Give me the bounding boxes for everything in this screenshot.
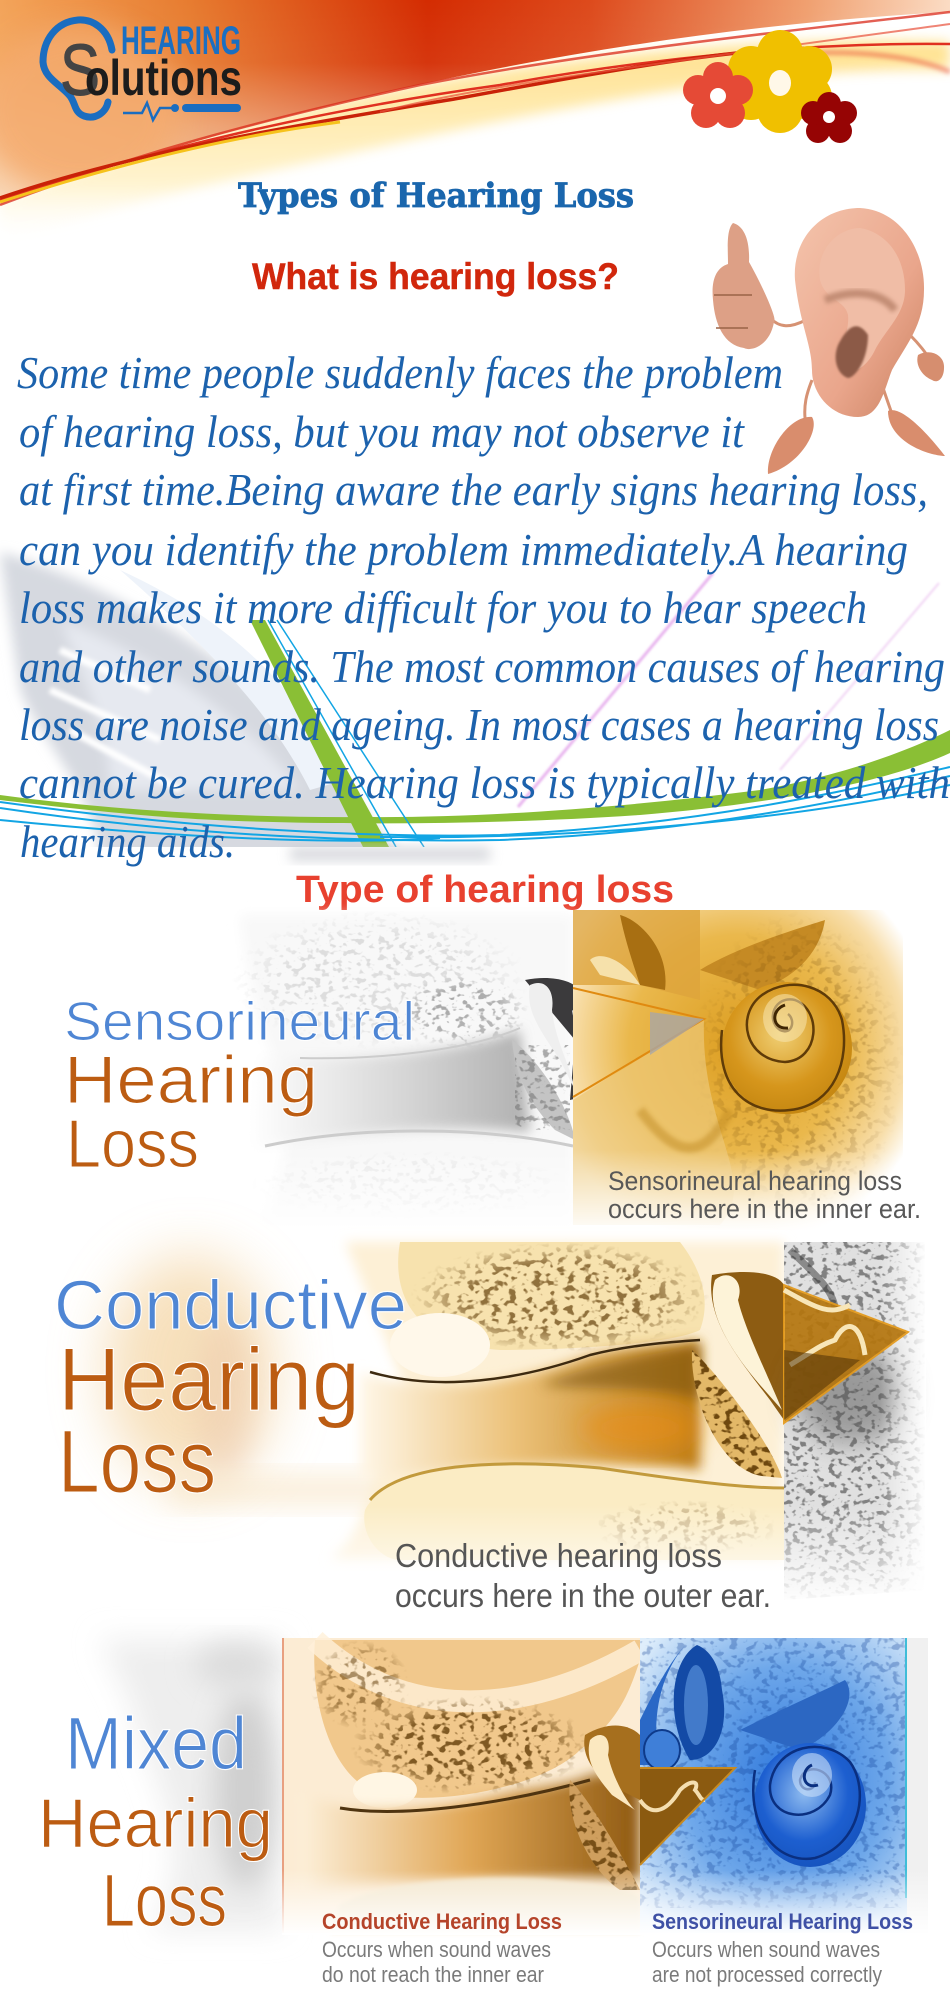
icon: ear outline: [43, 20, 112, 117]
ear body: [795, 208, 924, 417]
body paragraph: of hearing loss, but you may not observe it: [19, 406, 745, 457]
blue cochlea: [754, 1743, 866, 1867]
globe and swoosh backdrop: [0, 552, 950, 860]
right hand: [917, 352, 944, 381]
blue sensorineural illustration: [640, 1638, 928, 1933]
conductive caption: Conductive Hearing Loss: [322, 1909, 562, 1934]
orange pointer triangle: [640, 1768, 735, 1865]
heading: What is hearing loss?: What is hearing loss?: [252, 256, 619, 297]
logo word: HEARING: HEARING: [121, 19, 241, 63]
icon: yellow flower: [728, 30, 832, 133]
grey area: [784, 1242, 926, 1602]
panel title: Sensorineural: [64, 990, 415, 1052]
icon: red flower: [683, 62, 753, 128]
panel title: [38, 1702, 273, 1942]
conductive caption: [322, 1909, 562, 1987]
sensorineural caption: [652, 1909, 913, 1987]
header swoosh banner: [0, 0, 950, 245]
icon: pulse line and bar: [123, 103, 172, 120]
icon: dark red flower: [801, 92, 857, 143]
caption: [395, 1537, 771, 1614]
conductive caption: do not reach the inner ear: [322, 1962, 544, 1987]
panel title: Hearing: [64, 1042, 318, 1118]
panel title: Loss: [58, 1411, 216, 1511]
caption: [608, 1166, 921, 1224]
body paragraph: hearing aids.: [20, 816, 235, 867]
right foot: [888, 410, 945, 456]
caption: Conductive hearing loss: [395, 1537, 722, 1574]
captions: [322, 1909, 913, 1987]
faint purple streaks: [518, 573, 713, 807]
caption: occurs here in the inner ear.: [608, 1194, 921, 1224]
body paragraph: loss makes it more difficult for you to hear speech: [19, 582, 867, 633]
orange pointer triangle: [784, 1285, 908, 1423]
sensorineural caption: Sensorineural Hearing Loss: [652, 1909, 913, 1934]
fade to white at bottom: [230, 1150, 920, 1235]
fade to white at bottom: [320, 1505, 930, 1605]
logo word: Solutions: S: [60, 31, 100, 111]
logo: Hearing Solutions: olutions: [85, 50, 242, 106]
orange conductive illustration: [282, 1638, 640, 1933]
caption: occurs here in the outer ear.: [395, 1577, 771, 1614]
panel: conductive hearing loss: [54, 1242, 930, 1614]
panel title: [54, 1266, 407, 1511]
grey brushed globe: [0, 552, 400, 860]
panel: sensorineural hearing loss: [64, 905, 921, 1240]
orange pointer triangle: [573, 988, 704, 1097]
logo: Hearing Solutions: [43, 19, 242, 120]
grey brush shadow under backdrop: [290, 847, 490, 861]
conductive caption: Occurs when sound waves: [322, 1937, 551, 1962]
body paragraph: can you identify the problem immediately.A hearing: [19, 524, 908, 575]
heading: Types of Hearing Loss: Types of Hearing Loss: [238, 176, 634, 216]
panel: mixed hearing loss: [38, 1638, 932, 1987]
body paragraph: [17, 347, 950, 867]
thumbs-up hand: [713, 223, 775, 349]
grey wash behind title: [100, 1640, 282, 1930]
sensorineural caption: are not processed correctly: [652, 1962, 882, 1987]
icon: thumbs-up ear character: [713, 208, 945, 474]
sensorineural caption: Occurs when sound waves: [652, 1937, 880, 1962]
flowers: [683, 30, 857, 143]
left foot: [768, 417, 814, 474]
eardrum: [692, 1350, 782, 1478]
fade to white at bottom: [282, 1870, 932, 1935]
orange wash behind title: [105, 1255, 440, 1505]
green curved band: [0, 730, 950, 823]
panel title: Loss: [66, 1106, 199, 1182]
panel title: Hearing: [58, 1329, 360, 1429]
panel title: Loss: [102, 1859, 227, 1942]
panel title: [64, 990, 415, 1182]
caption: Sensorineural hearing loss: [608, 1166, 902, 1196]
gold inner ear illustration: [573, 905, 905, 1240]
arms and legs: [770, 318, 932, 418]
blue lines: [268, 620, 424, 847]
heading: Type of hearing loss: Type of hearing loss: [296, 869, 674, 911]
grey outer and middle ear illustration: [246, 905, 576, 1202]
ossicles: [711, 1272, 784, 1420]
body paragraph: Some time people suddenly faces the problem: [17, 347, 783, 398]
cochlea spiral: [722, 982, 852, 1114]
gold ear illustration: [330, 1242, 784, 1560]
panel title: Mixed: [65, 1702, 247, 1785]
panel title: Conductive: [54, 1266, 407, 1344]
panel title: Hearing: [38, 1784, 273, 1862]
green diagonal band: [250, 620, 389, 847]
